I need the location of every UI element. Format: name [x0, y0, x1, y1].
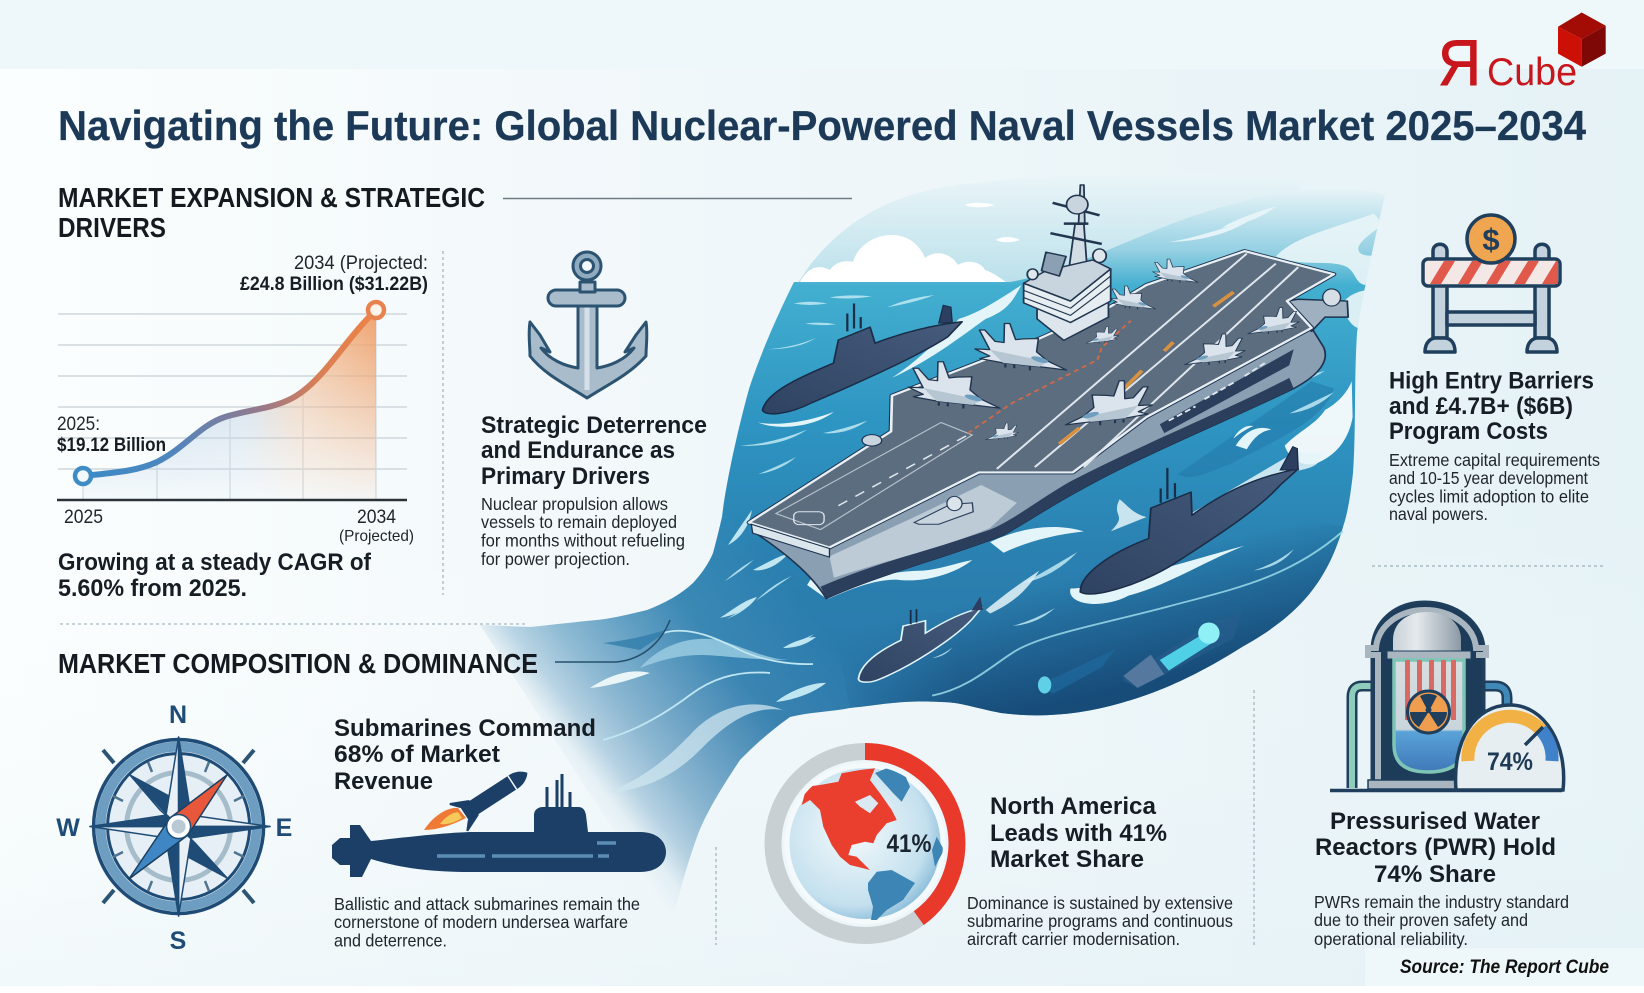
axis labels: 2025: [64, 507, 103, 528]
hull details: [437, 843, 616, 856]
strategic body: [481, 494, 685, 569]
fuel rods: [1405, 660, 1456, 720]
heading: submarines: [334, 715, 596, 795]
cloud: [800, 203, 1020, 282]
text: pressurised water reactors: [1314, 808, 1569, 949]
chart area fill: [83, 310, 376, 500]
compass letters: W: [56, 814, 80, 842]
2025 value label: [57, 414, 166, 456]
chart axis: [57, 499, 407, 501]
icon: reactor with gauge: [1330, 602, 1564, 790]
north america: [802, 768, 897, 870]
wave lines: [932, 531, 1343, 696]
barriers body: and 10-15 year development: [1389, 468, 1588, 488]
carrier hull: [756, 328, 1325, 599]
logo: RCube: [1438, 12, 1606, 99]
logo cube: [1558, 12, 1606, 67]
text: submarines body: [334, 894, 640, 950]
sky swoosh: [793, 175, 1300, 290]
submarine 1: [762, 304, 962, 414]
axis labels: [64, 507, 414, 545]
upper right foam: [1169, 206, 1383, 464]
strategic body: for months without refueling: [481, 530, 685, 550]
pwr heading: Reactors (PWR) Hold: [1315, 834, 1556, 861]
end marker: [368, 302, 384, 318]
pwr heading: [1315, 808, 1556, 888]
compass letters: [56, 701, 292, 955]
donut track: [773, 752, 957, 936]
pwr heading: Pressurised Water: [1330, 808, 1540, 835]
compass ring: [94, 740, 264, 914]
2034 value label: [240, 253, 428, 295]
icon: compass rose: [56, 701, 292, 955]
CAGR statement: Growing at a steady CAGR of: [58, 549, 372, 576]
chart line: [83, 310, 376, 476]
heading: market expansion: MARKET EXPANSION & STRATEGIC: [58, 182, 485, 213]
north america body: Dominance is sustained by extensive: [967, 893, 1233, 913]
deck orange dashes: [1059, 292, 1233, 444]
sea ticks: [725, 295, 1334, 658]
submarine 3: [858, 571, 1039, 682]
icon: submarine silhouette: [332, 759, 666, 877]
text: submarines body: Ballistic and attack submarines remain the: [334, 894, 640, 914]
wake of submarine 1: [758, 285, 1021, 427]
text: submarines body: and deterrence.: [334, 930, 447, 950]
axis labels: 2034: [357, 507, 396, 528]
axis labels: (Projected): [339, 528, 414, 545]
heading: submarines: Submarines Command: [334, 715, 596, 742]
compass letters: E: [276, 814, 292, 842]
radiation symbol: [1408, 691, 1450, 733]
hero illustration: carrier and submarines in the sea: [480, 175, 1385, 920]
globe: [787, 766, 944, 922]
heading: submarines: Revenue: [334, 768, 433, 795]
missile flame: [424, 808, 466, 830]
compass diagonal points: [130, 775, 227, 878]
start marker: [75, 468, 91, 484]
compass main points: [90, 737, 270, 916]
barriers heading: and £4.7B+ ($6B): [1389, 393, 1573, 420]
strategic body: vessels to remain deployed: [481, 512, 677, 532]
north america heading: Leads with 41%: [990, 820, 1167, 847]
missile: [450, 759, 536, 831]
heading: market expansion: DRIVERS: [58, 212, 166, 243]
pwr heading: 74% Share: [1374, 861, 1496, 888]
island tower: [1024, 185, 1111, 340]
dollar coin: $: [1482, 222, 1500, 257]
2025 value label: 2025:: [57, 414, 100, 435]
dome: [1393, 612, 1461, 651]
compass needle: [129, 775, 227, 879]
source note: Source: The Report Cube: [1400, 957, 1609, 978]
line chart: market growth 2025 to 2034: [57, 253, 428, 545]
south america: [868, 870, 915, 920]
logo wordmark: Я: [1438, 26, 1481, 99]
submarine 2: [1070, 447, 1325, 604]
strategic body: for power projection.: [481, 549, 630, 569]
hull shadow on water: [1178, 381, 1334, 477]
barriers heading: High Entry Barriers: [1389, 368, 1594, 394]
barriers heading: [1389, 368, 1594, 445]
strategic heading: Primary Drivers: [481, 463, 650, 490]
north america heading: Market Share: [990, 846, 1144, 873]
heading: market expansion: [58, 182, 485, 243]
donut chart: North America 41%: [773, 752, 957, 936]
north america body: submarine programs and continuous: [967, 911, 1233, 931]
title: Navigating the Future: Global Nuclear-Powered Naval Vessels Market 2025–2034: [58, 102, 1587, 149]
compass letters: S: [170, 927, 186, 955]
pwr body: PWRs remain the industry standard: [1314, 892, 1569, 912]
heading: market composition: MARKET COMPOSITION & DOMINANCE: [58, 648, 538, 679]
strategic body: Nuclear propulsion allows: [481, 494, 668, 514]
runway markings: [776, 254, 1298, 530]
gauge: 74%: [1487, 748, 1533, 776]
icon: road barrier with dollar coin: [1423, 215, 1560, 352]
greenland: [875, 768, 910, 802]
reactor vessel: [1394, 660, 1464, 772]
text: strategic deterrence: [481, 412, 707, 569]
deck circle marking: [794, 512, 824, 525]
2034 value label: 2034 (Projected:: [294, 253, 428, 274]
barriers heading: Program Costs: [1389, 418, 1548, 445]
wake foam of carrier: [807, 426, 1271, 599]
containment arch: [1372, 602, 1484, 790]
logo wordmark: Cube: [1487, 51, 1577, 94]
tail streaks: [590, 510, 826, 793]
compass letters: N: [169, 701, 187, 729]
CAGR statement: [58, 549, 372, 602]
strategic heading: Strategic Deterrence: [481, 412, 707, 439]
pwr body: due to their proven safety and: [1314, 910, 1528, 930]
pwr body: [1314, 892, 1569, 949]
2025 value label: $19.12 Billion: [57, 435, 166, 456]
text: submarines body: cornerstone of modern undersea warfare: [334, 912, 628, 932]
gauge: [1456, 705, 1564, 790]
CAGR statement: 5.60% from 2025.: [58, 575, 247, 602]
icon: anchor: [529, 252, 647, 398]
north america body: aircraft carrier modernisation.: [967, 929, 1180, 949]
text: high entry barriers: [1389, 368, 1600, 524]
hudson bay: [855, 795, 878, 813]
jets: [908, 259, 1299, 440]
barriers body: [1389, 450, 1600, 524]
reactor plinth: [1368, 780, 1458, 789]
glowing propulsion cylinders: [1038, 612, 1242, 694]
barriers body: naval powers.: [1389, 504, 1488, 524]
deep water band: [851, 530, 1342, 716]
pwr body: operational reliability.: [1314, 929, 1468, 949]
text: north america: [967, 793, 1233, 949]
donut value: 41%: [886, 830, 932, 858]
logo wordmark: [1438, 26, 1577, 99]
north america heading: [990, 793, 1167, 873]
north america body: [967, 893, 1233, 949]
sea body with tail fading left: [480, 188, 1385, 920]
heading: submarines: 68% of Market: [334, 741, 500, 768]
strategic heading: [481, 412, 707, 490]
donut share arc: [865, 752, 957, 918]
right sponson: [1287, 299, 1348, 331]
barriers body: cycles limit adoption to elite: [1389, 486, 1589, 506]
barriers body: Extreme capital requirements: [1389, 450, 1600, 470]
flight deck: [749, 251, 1334, 547]
north america heading: North America: [990, 793, 1156, 820]
chart grid: [58, 314, 407, 500]
aircraft carrier: [749, 185, 1348, 599]
strategic heading: and Endurance as: [481, 437, 675, 464]
2034 value label: £24.8 Billion ($31.22B): [240, 274, 428, 295]
reactor pipes: [1352, 686, 1507, 788]
